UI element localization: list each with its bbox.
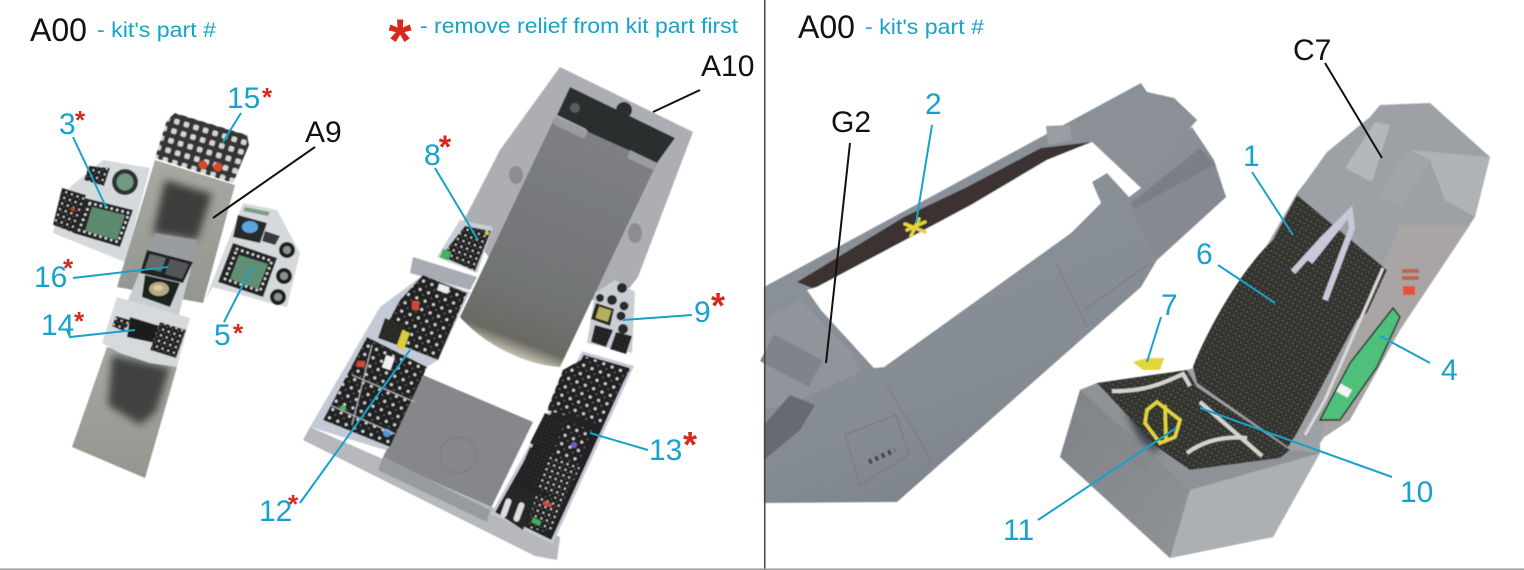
callout: 13: 13 xyxy=(649,434,682,467)
callout: 14: * xyxy=(74,306,85,336)
legend: remove relief note: - remove relief from kit part first xyxy=(420,15,738,38)
panel: ejection seat photo xyxy=(1060,103,1490,558)
callout: 9: 9 xyxy=(694,296,711,329)
panel 13 xyxy=(493,353,632,542)
callout: 10 xyxy=(1200,408,1433,509)
panel: fuselage part G2 photo xyxy=(760,83,1226,503)
callout: 9 xyxy=(623,285,725,329)
callout: 11: 11 xyxy=(1003,514,1034,547)
callout: C7 xyxy=(1293,34,1382,158)
callout: 5: * xyxy=(233,318,244,348)
heading: right kit part legend: A00 xyxy=(798,9,855,45)
heading: left kit part legend: A00 xyxy=(30,12,87,48)
panel 16 twin displays xyxy=(140,250,193,307)
callout: 1 xyxy=(1243,140,1293,235)
callout: 14: 14 xyxy=(41,309,74,342)
callout: 9: * xyxy=(711,285,725,326)
callout: 3: 3 xyxy=(59,108,76,141)
heading: left kit part legend: - kit's part # xyxy=(97,19,216,42)
divider between panels xyxy=(764,0,766,570)
callout: 5 xyxy=(214,267,252,352)
callout: 12: * xyxy=(288,489,299,519)
upper tub body xyxy=(460,67,693,367)
panel 12 xyxy=(310,275,470,450)
callout: 2: 2 xyxy=(925,88,942,121)
callout: A10: A10 xyxy=(701,50,754,83)
callout: 3 xyxy=(59,105,106,207)
panel 15 keypad xyxy=(155,113,249,183)
callout: A10 xyxy=(653,50,754,112)
lower column xyxy=(72,347,177,478)
callout: 6: 6 xyxy=(1196,238,1213,271)
callout: 14 xyxy=(41,306,135,342)
callout: A9 xyxy=(213,116,342,218)
fuselage body xyxy=(760,83,1226,503)
bottom border xyxy=(0,568,1524,570)
callout: 3: * xyxy=(75,105,86,135)
callout: 8: * xyxy=(439,129,452,165)
dark inner sill xyxy=(797,142,1092,290)
callout: 12 xyxy=(259,350,410,528)
legend: remove relief note: * xyxy=(388,7,412,74)
callout: 15: 15 xyxy=(227,82,260,115)
panel 14 console xyxy=(102,297,190,367)
callout: 8 xyxy=(424,129,478,240)
callout: 7 xyxy=(1147,289,1178,362)
panel: tub part A10 photo xyxy=(303,67,693,560)
callout: 1: 1 xyxy=(1243,140,1260,173)
central column xyxy=(117,160,235,318)
heading: left kit part legend xyxy=(30,12,216,48)
green side panel xyxy=(1305,268,1419,435)
yellow parts 7 and 11 xyxy=(1133,358,1180,443)
seat pan cushion xyxy=(1097,370,1290,470)
seat body xyxy=(1060,103,1490,558)
callout: 16: 16 xyxy=(34,261,67,294)
callout: 4: 4 xyxy=(1441,354,1458,387)
callout: 7: 7 xyxy=(1161,289,1178,322)
yellow part 2 xyxy=(905,219,925,236)
panel 8 xyxy=(410,220,493,290)
bottom bay and rim xyxy=(303,375,560,560)
seat back cushion xyxy=(1193,195,1387,447)
callout: A9: A9 xyxy=(305,116,342,149)
callout: 5: 5 xyxy=(214,319,231,352)
callout: 16 xyxy=(34,253,168,294)
callout: 11 xyxy=(1003,428,1176,547)
heading: right kit part legend xyxy=(798,9,984,45)
callout: 4 xyxy=(1380,336,1458,387)
callout: 13 xyxy=(590,424,697,467)
legend: remove relief note xyxy=(388,7,738,74)
heading: right kit part legend: - kit's part # xyxy=(865,16,984,39)
callout: 10: 10 xyxy=(1400,476,1433,509)
callout: 13: * xyxy=(683,424,697,465)
cockpit opening xyxy=(807,142,1141,368)
panel 9 xyxy=(587,280,635,354)
callout: G2 xyxy=(826,106,871,363)
callout: 2 xyxy=(916,88,942,223)
callout: 16: * xyxy=(63,253,74,283)
callout: G2: G2 xyxy=(831,106,871,139)
panel: instrument panel part A9 photo xyxy=(53,113,300,478)
callout: 8: 8 xyxy=(424,139,441,172)
callout: 6 xyxy=(1196,238,1275,303)
left wing of panel xyxy=(53,160,150,262)
callout: 12: 12 xyxy=(259,495,292,528)
shoulder straps xyxy=(1293,212,1352,300)
callout: C7: C7 xyxy=(1293,34,1331,67)
right wing of panel xyxy=(205,203,300,307)
callout: 15: * xyxy=(262,82,273,112)
callout: 15 xyxy=(223,82,273,142)
